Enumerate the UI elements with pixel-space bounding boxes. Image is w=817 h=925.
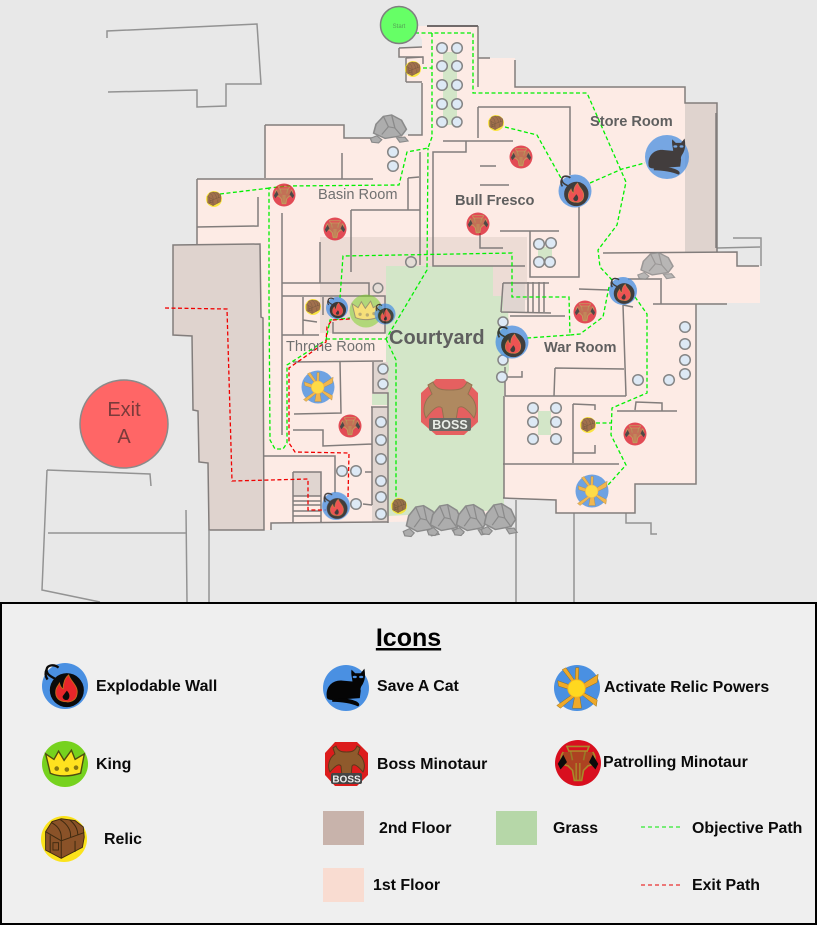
exit A marker: A xyxy=(117,426,131,448)
legend panel xyxy=(1,603,816,924)
objective paths xyxy=(220,33,647,498)
top wall xyxy=(427,25,478,27)
explodable wall markers xyxy=(322,174,637,520)
legend: relic: Relic xyxy=(104,831,142,848)
legend: grass xyxy=(496,811,598,845)
cat marker xyxy=(645,135,689,179)
legend: explodable wall xyxy=(42,663,217,709)
room labels: Basin Room xyxy=(318,187,398,203)
legend title: Icons xyxy=(376,624,441,652)
legend: king: King xyxy=(96,756,131,773)
second floor east wing xyxy=(685,103,717,252)
legend: activate relic powers: Activate Relic Powers xyxy=(604,679,769,696)
legend: patrolling minotaur xyxy=(555,740,748,786)
second floor west wing xyxy=(173,244,264,530)
legend: 2nd floor: 2nd Floor xyxy=(379,820,451,837)
legend: save a cat xyxy=(323,665,460,711)
room labels: Bull Fresco xyxy=(455,193,535,209)
start marker: Start xyxy=(393,24,406,30)
room labels: Courtyard xyxy=(389,327,485,349)
map area xyxy=(0,0,817,603)
map background xyxy=(0,0,817,603)
legend: explodable wall: Explodable Wall xyxy=(96,678,217,695)
exit paths xyxy=(165,308,350,510)
exit A marker: Exit xyxy=(107,399,141,421)
legend: activate relic powers xyxy=(554,665,769,711)
exit A marker xyxy=(80,380,168,468)
boss minotaur marker: BOSS xyxy=(432,418,468,432)
surrounding building outlines xyxy=(42,24,761,602)
legend: grass: Grass xyxy=(553,820,598,837)
patrolling minotaur markers xyxy=(272,146,646,446)
faded explodable wall marker xyxy=(374,304,396,324)
legend: king xyxy=(42,741,131,787)
rubble piles xyxy=(370,115,675,537)
relic markers xyxy=(206,61,596,514)
legend: boss minotaur xyxy=(325,742,487,786)
relic power markers xyxy=(302,370,608,508)
legend: 2nd floor xyxy=(323,811,451,845)
legend: save a cat: Save A Cat xyxy=(377,678,460,695)
legend: 1st floor: 1st Floor xyxy=(373,877,440,894)
legend: boss minotaur: BOSS xyxy=(332,774,361,786)
room labels: Store Room xyxy=(590,114,673,130)
legend: exit path xyxy=(641,877,760,894)
room labels: Throne Room xyxy=(286,339,375,355)
legend: relic xyxy=(41,816,142,862)
start marker xyxy=(380,6,418,44)
room labels xyxy=(286,114,673,356)
legend: boss minotaur: Boss Minotaur xyxy=(377,756,487,773)
legend: patrolling minotaur: Patrolling Minotaur xyxy=(603,754,748,771)
courtyard grass xyxy=(372,266,509,516)
legend: objective path: Objective Path xyxy=(692,820,802,837)
interior walls xyxy=(197,26,759,530)
room labels: War Room xyxy=(544,340,616,356)
second floor stair columns xyxy=(293,282,525,522)
legend: 1st floor xyxy=(323,868,440,902)
grass strips xyxy=(443,52,552,435)
king marker xyxy=(350,294,382,328)
legend: exit path: Exit Path xyxy=(692,877,760,894)
rest spots xyxy=(337,43,690,519)
boss minotaur marker xyxy=(421,379,478,435)
first floor area xyxy=(197,26,760,530)
translucent upper walkway xyxy=(320,237,527,333)
